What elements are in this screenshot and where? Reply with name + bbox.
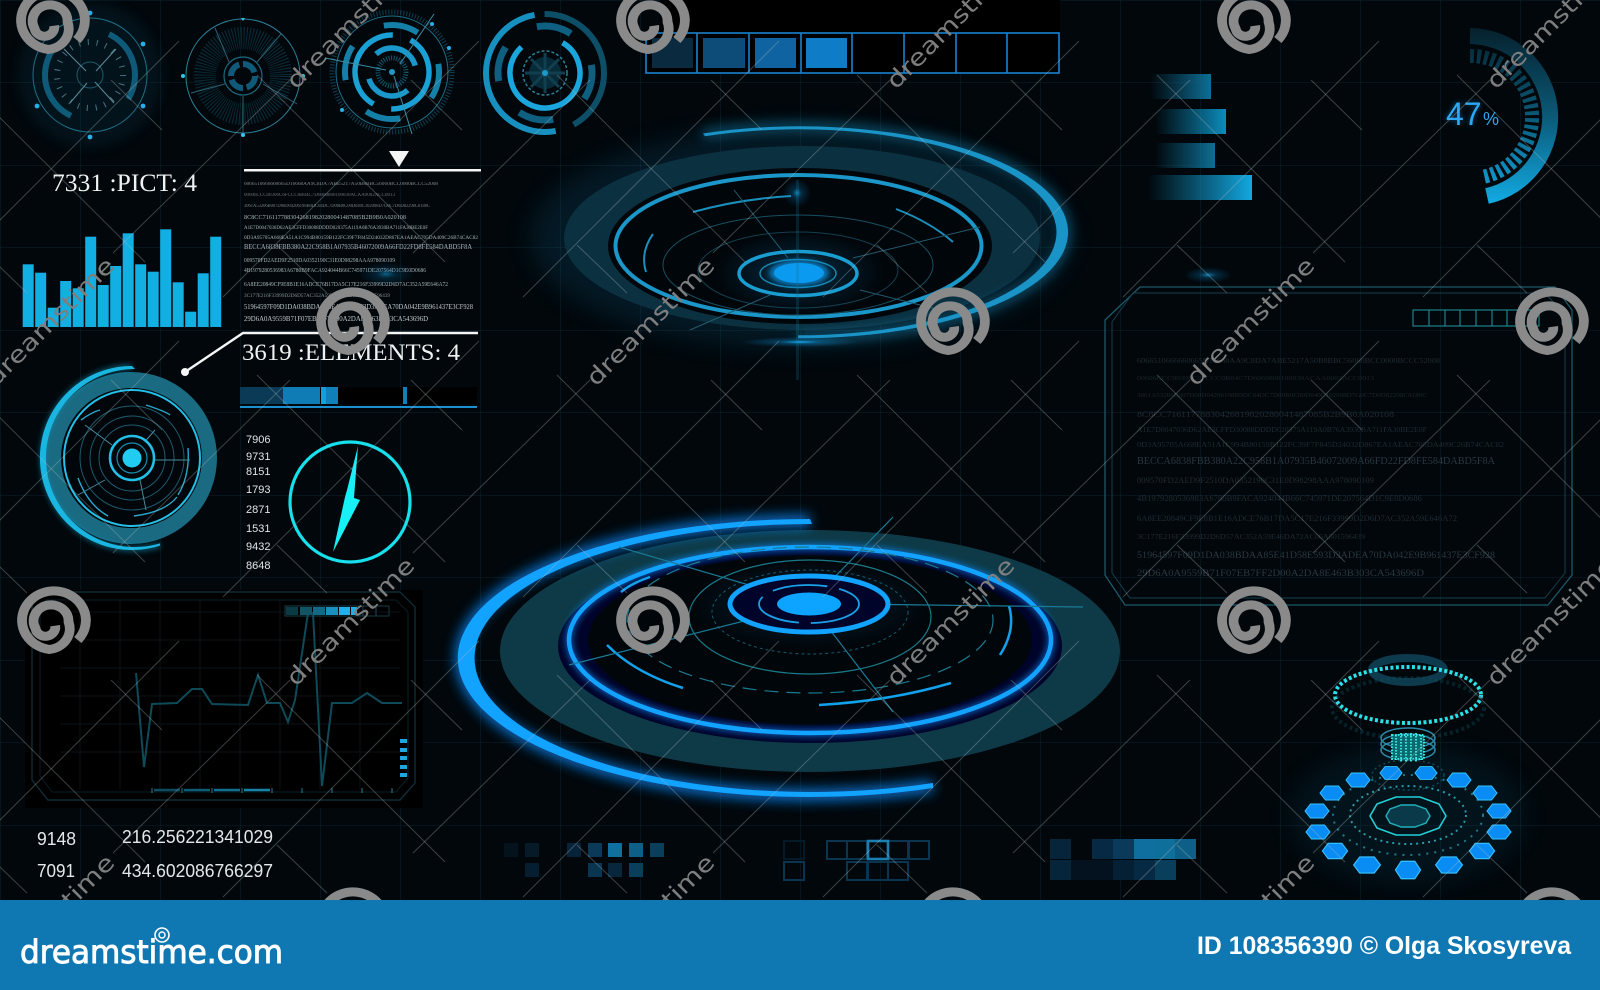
hex data lines: BECCA6838FBB380A22C958B1A07935B46072009A66FD22FD8FE584DABD5F8A (244, 243, 472, 251)
panel: top segmented bar (646, 0, 1060, 73)
watermark: dreamstime text: dreamstime (882, 553, 1020, 691)
radar rings (616, 175, 982, 330)
hexagon ring (1305, 767, 1511, 879)
watermark: dreamstime text: dreamstime (1182, 253, 1320, 391)
frame text: 6066510666660665D16668AA9C8DA7ABE5217A50B8BBC56060BCC0000BCCC52008 (1137, 357, 1441, 365)
hex data lines: A1E7D0047036D62AE3CFFD30088DDDD020375A119A0B76A3930BA711FA30BE2E0F (244, 225, 428, 231)
panel: data text block (244, 151, 481, 323)
frame text: A1E7D0047036D62AE3CFFD30088DDDD020375A119A0B76A3930BA711FA30BE2E0F (1137, 426, 1427, 434)
watermark: dreamstime text: dreamstime (1182, 850, 1320, 988)
frame text: 4B1979280536983A6780B9FACA924044B66C745971DE207564D1C9E0D0686 (1137, 494, 1422, 503)
hex data lines: 8C8CC71611778830426819820280041487085B2B9B0A020108 (244, 214, 406, 221)
panel: stacked gradient bars (1148, 74, 1252, 200)
footer logo: dreamstime.com (20, 933, 283, 971)
frame text: 0D3A95705A668EA51A1C994B80159B122FC39F7F845D24032D867EA1AEAC705DA409C26B74CAC82 (1137, 441, 1505, 449)
lower radar band (500, 530, 1120, 772)
radial gauge 3 (325, 12, 452, 134)
number column: 8648 (246, 560, 270, 572)
numeric readouts: 216.256221341029 (122, 827, 273, 847)
squares group 2 (784, 841, 929, 880)
cylinder (1381, 728, 1435, 762)
top dim ring (1372, 658, 1444, 682)
hex data lines: 6066510666660665D16668AA9C8DA7ABE5217A50B8BBC56060BCC0000BCCC52008 (244, 182, 439, 187)
panel: upper concentric radar (530, 126, 1070, 380)
lower radar rings (569, 517, 1083, 733)
numeric readouts: 434.602086766297 (122, 861, 273, 881)
frame text: 51964597F09D1DA038BDAA85E41D58E593D3ADEA70DA042E9B961437E3CF928 (1137, 551, 1495, 561)
leader dot (181, 368, 189, 376)
progress bar (240, 387, 477, 408)
frame text (1137, 357, 1505, 579)
radial gauge 2 (181, 18, 305, 137)
hex data lines: 3C177E216F33999D2D6D57AC352A59E46DA72AC06A501596439 (244, 293, 390, 299)
hex data lines: 4B1979280536983A6780B9FACA924044B66C745971DE207564D1C9E0D0686 (244, 268, 426, 274)
lower radar core (689, 559, 929, 649)
numeric readouts: 7091 (37, 861, 75, 881)
gauge value: 47 (1446, 96, 1482, 132)
number column: 1531 (246, 523, 270, 535)
hex data lines: 51964597F09D1DA038BDAA85E41D58E593D3ADEA70DA042E9B961437E3CF928 (244, 303, 473, 311)
numeric readouts (37, 827, 273, 881)
ECG scale dots (400, 739, 407, 777)
frame text: 3C177E216F33999D2D6D57AC352A59E46DA72AC06A501596439 (1137, 533, 1366, 541)
hex data lines: 6A8EE20849CF9E8B1E16ADCE76B17DA5C17E216F33999D2D6D7AC352A59E646A72 (244, 282, 448, 288)
pointer triangle (389, 151, 409, 167)
radial gauge 4 (477, 5, 613, 141)
squares group 3 (1050, 839, 1196, 880)
left gauge outer arc (40, 366, 160, 550)
panel: ECG monitor (25, 590, 423, 808)
heading: elements: 3619 :ELEMENTS: 4 (242, 340, 460, 366)
frame text: 8C8CC71611778830426819820280041487085B2B9B0A020108 (1137, 410, 1394, 419)
watermark: dreamstime text: dreamstime (582, 253, 720, 391)
bar chart (23, 229, 221, 327)
frame text: 00606CCC00306C6FCCC0B04C7D6060800100030ACAA0002ACC0013 (1137, 376, 1374, 382)
ECG progress (285, 606, 389, 616)
footer credit: ID 108356390 © Olga Skosyreva (1197, 932, 1572, 960)
octagon centre (1370, 797, 1446, 835)
hex data lines: 00606CCC00306C6FCCC0B04C7D6060800100030ACAA0002ACC0013 (244, 193, 395, 198)
panel: 47 percent gauge (1446, 36, 1550, 196)
radial gauge 1 (18, 3, 162, 147)
panel: top radial gauges (18, 3, 613, 147)
watermark: dreamstime text: dreamstime (582, 850, 720, 988)
number column: 7906 (246, 434, 270, 446)
gauge value: 47 (1446, 96, 1482, 132)
number column (246, 434, 270, 572)
lower radar outer arc (458, 519, 933, 797)
gauge value (1446, 96, 1499, 132)
radar outer arc (703, 126, 1068, 338)
number column: 9731 (246, 451, 270, 463)
panel: right framed data (1105, 267, 1572, 605)
ECG bottom ticks (152, 788, 392, 793)
gauge value: % (1483, 109, 1499, 129)
heading: pict: 7331 :PICT: 4 (52, 168, 197, 197)
frame text: 3061A53206B007D60D04206198B0DC04DC7D00B0C00D040C102008D7G0C7D0D82298C8180C (1137, 392, 1427, 399)
hex data lines: 3061A53206B007D60D04206198B0DC04DC7D00B0C00D040C102008D7G0C7D0D82298C8180C (244, 204, 431, 209)
radar core (714, 179, 884, 380)
squares group 1 (504, 843, 664, 877)
footer bar (0, 900, 1600, 990)
panel: lower concentric radar (458, 517, 1120, 797)
watermark: dreamstime text: dreamstime (1482, 553, 1600, 691)
bottom square strips (504, 839, 1196, 880)
number column: 9432 (246, 541, 270, 553)
hex data lines: 009570FD2AED9F2510DA0352190C31E0D98298AAA978090109 (244, 258, 395, 264)
frame text: 009570FD2AED9F2510DA0352190C31E0D98298AAA978090109 (1137, 476, 1374, 485)
radar band (564, 146, 1040, 330)
dotted ring (1335, 667, 1481, 723)
frame text: 29D6A0A9559B71F07EB7FF2D00A2DA8E463B303CA543696D (1137, 569, 1424, 579)
hex data lines (244, 182, 478, 323)
frame text: 6A8EE20849CF9E8B1E16ADCE76B17DA5C17E216F33999D2D6D7AC352A59E646A72 (1137, 514, 1457, 523)
frame text: BECCA6838FBB380A22C958B1A07935B46072009A66FD22FD8FE584DABD5F8A (1137, 456, 1496, 467)
number column: 8151 (246, 466, 270, 478)
numeric readouts: 9148 (37, 829, 76, 849)
number column: 1793 (246, 484, 270, 496)
ECG trace (136, 613, 402, 786)
hex data lines: 0D3A95705A668EA51A1C994B80159B122FC39F7F845D24032D867EA1AEAC705DA409C26B74CAC82 (244, 235, 478, 241)
watermark: dreamstime text: dreamstime (282, 553, 420, 691)
dotted circles (1333, 760, 1483, 855)
radial gauge: left (40, 366, 209, 550)
panel: isometric hexagon module (1290, 658, 1526, 885)
leader line (185, 333, 478, 372)
frame progress (1413, 310, 1539, 326)
icon: compass (290, 442, 410, 562)
hex data lines: 29D6A0A9559B71F07EB7FF2D00A2DA8E463B303CA543696D (244, 315, 428, 323)
number column: 2871 (246, 504, 270, 516)
